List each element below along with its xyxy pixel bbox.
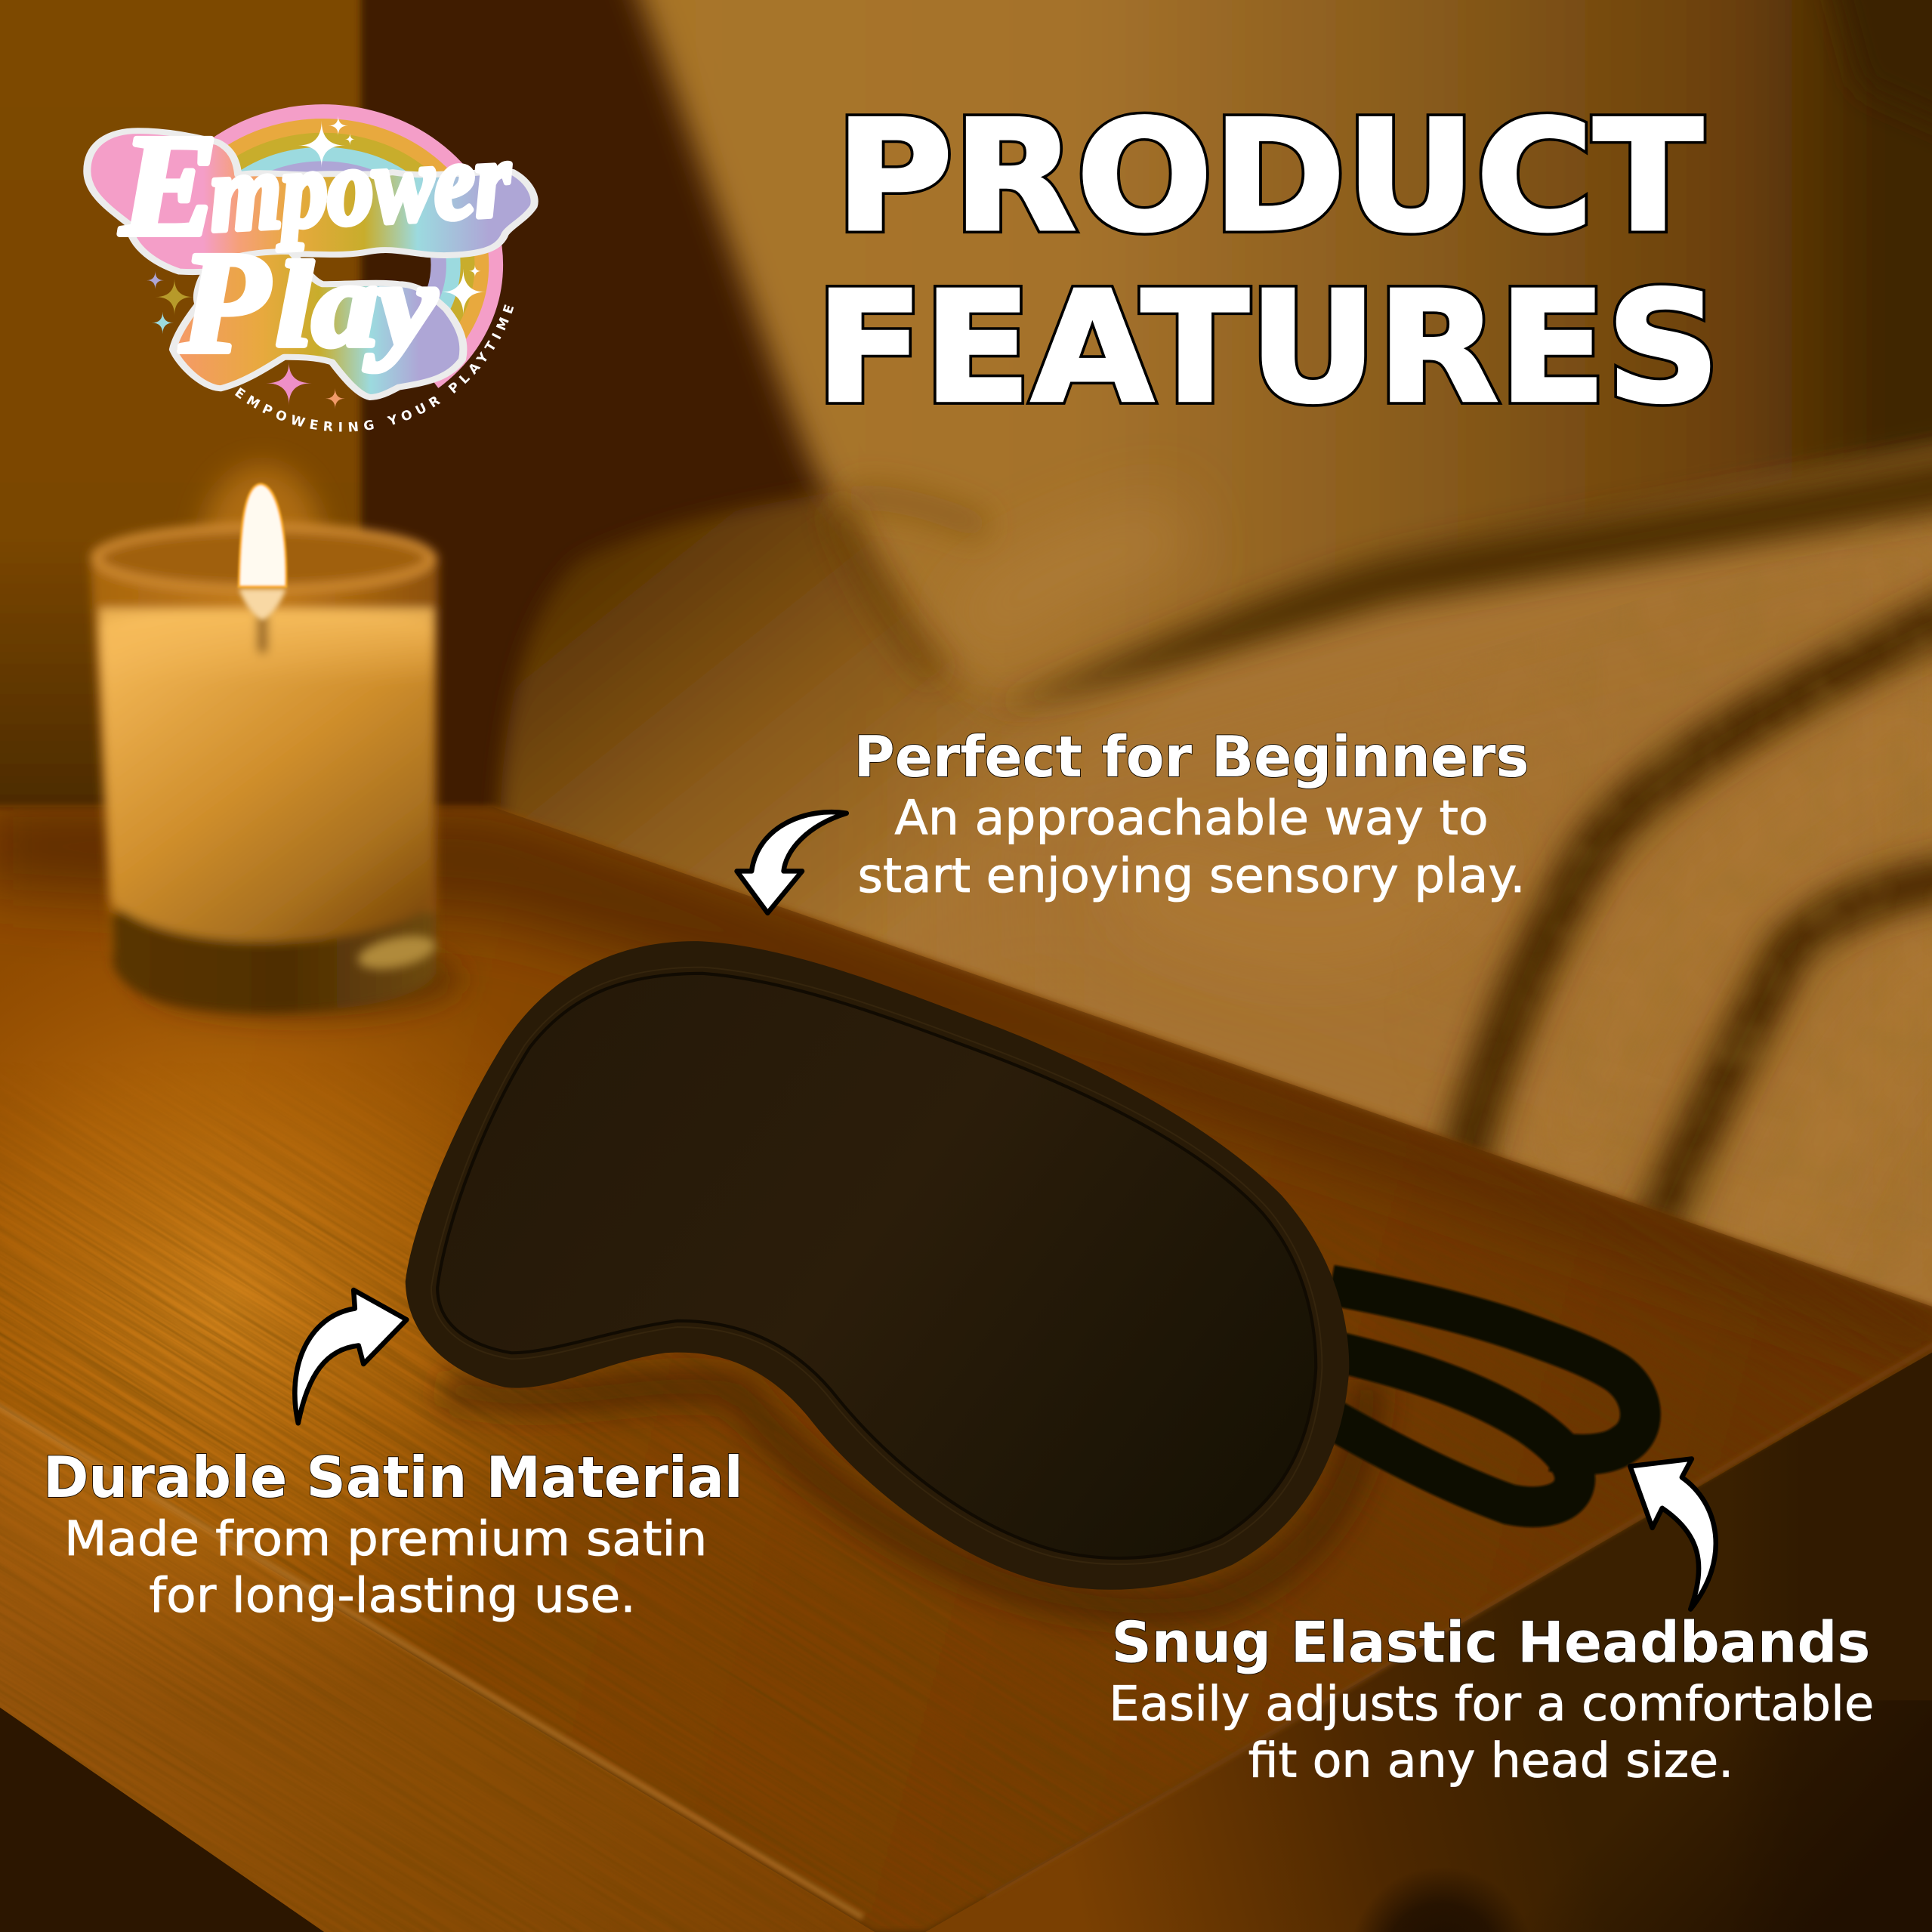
callout: Durable Satin Material: Durable Satin Material (43, 1444, 743, 1511)
candle (90, 466, 462, 1017)
pillow highlight (974, 529, 1183, 640)
logo word Play: lay (276, 238, 437, 372)
table back shadow (0, 801, 1932, 1368)
right dark face (1725, 1337, 1932, 1932)
bed right side tone (986, 493, 1932, 1356)
logo word Play (179, 221, 437, 383)
shade under pillow side (838, 505, 939, 675)
flame (239, 484, 286, 587)
flame base (239, 589, 285, 620)
glass base (111, 912, 437, 1013)
callout: Perfect for Beginners (854, 724, 1529, 904)
mask outer (406, 941, 1349, 1590)
callout: Snug Elastic Headbands (1109, 1609, 1874, 1788)
logo word Empower (119, 104, 514, 266)
callout: Snug Elastic Headbands: fit on any head size. (1248, 1733, 1733, 1788)
table top (0, 807, 1932, 1932)
base highlight (355, 930, 438, 975)
title: FEATURES (816, 258, 1720, 437)
table front glow (0, 1408, 350, 1642)
table edge highlight (0, 1400, 863, 1917)
title (816, 87, 1720, 437)
mask shadow (443, 1380, 1368, 1606)
logo sparkles (147, 116, 486, 409)
pillow (622, 0, 1932, 703)
callout: Perfect for Beginners: start enjoying sensory play. (857, 848, 1526, 904)
blanket texture (1577, 632, 1929, 1186)
logo word Empower: mpower (207, 119, 514, 255)
callout: Perfect for Beginners: An approachable way to (894, 790, 1489, 846)
upper right dark corner (1823, 0, 1932, 135)
lower right darkness (1479, 1700, 1932, 1932)
pillow fold (850, 498, 986, 529)
elastic headbands (1329, 1285, 1640, 1507)
callout: Snug Elastic Headbands: Easily adjusts for a comfortable (1109, 1676, 1874, 1732)
callout: Perfect for Beginners: Perfect for Beginners (854, 724, 1529, 790)
pillow crease (992, 449, 1932, 707)
seam highlight (431, 968, 1322, 1564)
upper strap (1331, 1285, 1640, 1455)
dark headboard (361, 0, 854, 838)
eye mask (406, 941, 1349, 1590)
logo rainbow (174, 112, 495, 382)
blanket lighter lumps (1171, 739, 1932, 1245)
table leg shadow (1343, 1860, 1540, 1932)
logo: Empower Play (87, 104, 535, 436)
arrow: to mask edge (295, 1290, 406, 1423)
lower strap (1329, 1350, 1575, 1507)
callout: Snug Elastic Headbands: Snug Elastic Headbands (1112, 1609, 1870, 1676)
logo word Empower: E (119, 104, 218, 266)
arrow: to top of mask (737, 812, 847, 913)
candle table shadow (142, 943, 462, 1017)
title: PRODUCT (835, 87, 1703, 265)
candle glass (90, 523, 439, 1011)
table front right face (925, 1337, 1932, 1932)
table light glow (0, 985, 550, 1628)
bed (499, 431, 1932, 1356)
wick (258, 613, 267, 653)
mask panel and seam (437, 974, 1316, 1558)
wax (100, 610, 434, 942)
table right edge line (986, 1341, 1932, 1897)
logo tagline: EMPOWERING YOUR PLAYTIME (235, 304, 514, 432)
glass rim (96, 527, 431, 589)
arrow: to headbands (1630, 1459, 1716, 1609)
blanket folds (1454, 603, 1932, 1269)
candle glow (203, 466, 322, 619)
callout: Durable Satin Material: Made from premium satin (64, 1511, 707, 1567)
logo 3D block: Play (173, 252, 463, 397)
wall (0, 0, 394, 838)
table front left face (0, 1392, 875, 1932)
callout: Durable Satin Material: for long-lasting use. (149, 1568, 636, 1624)
callout: Durable Satin Material (43, 1444, 743, 1624)
logo word Play: P (179, 221, 270, 383)
logo 3D block: Empower (87, 131, 535, 397)
title: PRODUCT (835, 87, 1703, 265)
lower left floor (0, 1690, 324, 1932)
wood grain (0, 807, 1932, 1932)
title: FEATURES (816, 258, 1720, 437)
